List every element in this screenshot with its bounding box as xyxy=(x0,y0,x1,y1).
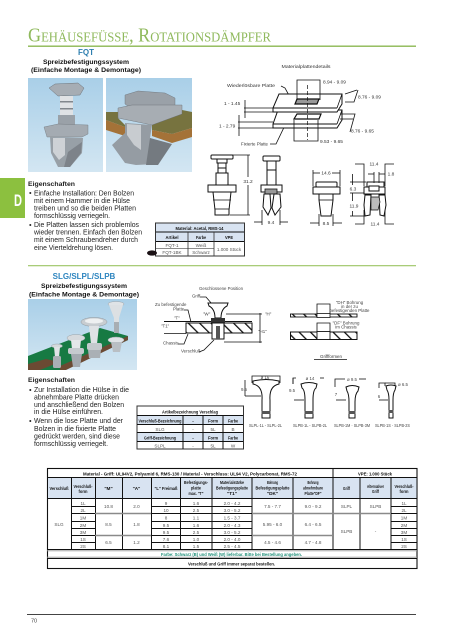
diagram: FQT bolt front view with 31.2 xyxy=(208,155,253,215)
text block: SLG properties: formschlüssig verriegelt. xyxy=(34,441,108,448)
table: main specifications: 3M xyxy=(401,530,407,535)
table: main specifications: Materialstärke xyxy=(220,480,244,485)
heading: FQT: FQT xyxy=(78,48,94,57)
table: main specifications: Befestigungsplatte xyxy=(216,486,248,490)
diagram: grip SLPB L: 9.5 xyxy=(289,388,296,393)
table: part number example: Form xyxy=(208,418,218,424)
table: main specifications: 9 xyxy=(165,501,168,506)
table: main specifications: "L" Freimaß xyxy=(154,486,178,491)
text block: SLG properties: Zur Installation die Hülse in die xyxy=(34,387,129,394)
table: main specifications: Alternativer xyxy=(367,484,384,489)
text block: FQT properties: Eigenschaften xyxy=(28,181,75,188)
divider: between product sections xyxy=(28,265,416,266)
table: part number example: Form xyxy=(208,436,218,440)
table: part number example: - xyxy=(192,436,194,440)
table: main specifications: 1.2 xyxy=(133,540,140,545)
heading: FQT: Spreizbefestigungssystem xyxy=(43,59,129,66)
table: main specifications: Bohrung xyxy=(267,480,278,485)
table: main specifications: 2M xyxy=(80,523,86,528)
table: main specifications: 5.95 - 6.0 xyxy=(263,522,283,527)
table: main specifications: SLPL xyxy=(341,504,353,509)
table: FQT material: VPE xyxy=(225,235,233,240)
diagram: hole sizes in plate and chassis xyxy=(290,300,370,340)
table: main specifications: form xyxy=(78,489,88,494)
table: part number example xyxy=(137,406,244,449)
table: main specifications xyxy=(47,468,417,568)
table: main specifications: "T1" xyxy=(227,491,237,496)
table: main specifications: Befestigungsplatte xyxy=(256,486,290,490)
diagram: material plate details xyxy=(219,64,381,148)
diagram: grip SLPB S xyxy=(375,382,410,428)
text block: FQT properties: mit einem Hammer in die Hülse xyxy=(34,198,130,205)
heading: SLG/SLPL/SLPB: (Einfache Montage & Demontage) xyxy=(29,292,139,298)
table: FQT material: 1.000 Stück xyxy=(217,247,242,252)
table: main specifications: form xyxy=(400,489,408,494)
table: FQT material: Weiß xyxy=(196,243,207,248)
table: main specifications: Verschluß und Griff immer separat bestellen. xyxy=(188,562,275,566)
text block: FQT properties xyxy=(28,181,142,252)
table: main specifications: Bohrung xyxy=(308,480,319,485)
photo: FQT mounted between plates xyxy=(106,78,192,172)
table: main specifications: Verschluß xyxy=(50,486,69,491)
table: main specifications: 2L xyxy=(401,508,407,513)
diagram: grip SLPB M: 7 xyxy=(335,392,338,397)
table: main specifications: 1L xyxy=(401,501,407,506)
table: main specifications: Griff xyxy=(343,486,350,491)
diagram: hole sizes in plate and chassis: "DH" Bohrung xyxy=(336,300,364,305)
diagram: FQT housing with 14.6 and 8.5: 14.6 xyxy=(321,170,331,176)
table: main specifications: Verschluß- xyxy=(74,484,93,489)
table: part number example: 5L xyxy=(210,427,216,432)
diagram: FQT housing with 14.6 and 8.5 xyxy=(310,170,342,227)
diagram: hole sizes in plate and chassis: "DF" Bohrung xyxy=(333,320,360,326)
diagram: closed position cross-section: Platte xyxy=(173,306,185,312)
table: FQT material: FQT-1BK xyxy=(162,250,183,255)
diagram: closed position cross-section xyxy=(155,286,272,354)
heading: FQT xyxy=(31,48,141,74)
table: main specifications: 10 xyxy=(163,508,169,513)
text block: SLG properties: und anschließend den Bolzen xyxy=(34,402,124,409)
diagram: grip SLPL: SLPL-1L - SLPL-2L xyxy=(249,423,282,428)
table: main specifications: Befestigungs- xyxy=(184,480,208,485)
diagram: FQT assembled section with 11.4, 1.8, 6.3, 11.9: 11.4 xyxy=(371,222,380,228)
table: FQT material: Farbe xyxy=(196,235,206,240)
table: main specifications: 1.5 - 3.7 xyxy=(224,516,241,520)
diagram: grip SLPB L: SLPB-1L - SLPB-2L xyxy=(293,423,327,428)
photo: SLG fasteners on green board xyxy=(28,299,137,370)
table: main specifications: Griff xyxy=(372,489,379,494)
table: main specifications: 2.0 xyxy=(133,504,140,509)
table: main specifications: 3.0 - 5.2 xyxy=(224,508,241,513)
table: part number example: - xyxy=(192,427,194,432)
table: part number example: - xyxy=(192,418,194,424)
diagram: grip SLPL: ø 16 xyxy=(261,375,270,380)
text block: SLG properties: gedrückt werden, sind diese xyxy=(34,434,120,440)
text block: SLG properties: in die Hülse einführen. xyxy=(34,409,103,416)
table: main specifications: VPE: 1.000 Stück xyxy=(358,472,392,476)
table: main specifications: "DK" xyxy=(267,491,278,496)
table: main specifications: SLPB xyxy=(341,529,352,534)
table: FQT material: FQT-1 xyxy=(165,243,179,248)
table: main specifications: 2L xyxy=(80,508,86,513)
heading: FQT: (Einfache Montage & Demontage) xyxy=(31,67,141,74)
diagram: grip SLPB S: 6 xyxy=(378,394,381,399)
table: main specifications: Material - Griff: UL94V2, Polyamid 6, RMS-130 / Material - Verschluss: UL94 V2, Polycarbonat, RMS-72 xyxy=(83,472,297,476)
table: main specifications: Farbe: Schwarz (B) und Weiß (W) lieferbar. Bitte bei Bestellung angeben. xyxy=(161,552,302,557)
diagram: FQT assembled section with 11.4, 1.8, 6.3, 11.9: 11.4 xyxy=(370,162,379,168)
diagram: material plate details: 9.53 - 9.65 xyxy=(320,139,343,145)
table: main specifications: 1M xyxy=(80,516,86,520)
table: main specifications: 6.5 xyxy=(105,540,112,545)
table: main specifications: 9.0 - 9.2 xyxy=(305,504,322,509)
table: main specifications: max. "T" xyxy=(188,491,204,496)
text block: SLG properties: Wenn die lose Platte und der xyxy=(34,418,124,425)
diagram: FQT assembled side view with 9.4: 9.4 xyxy=(268,220,275,226)
table: main specifications: 8.5 xyxy=(105,522,112,527)
diagram: FQT bolt front view with 31.2: 31.2 xyxy=(243,179,253,185)
text block: SLG properties: Bolzen in die fixierte Platte xyxy=(34,426,116,433)
diagram: grip SLPB M: SLPB-1M - SLPB-3M xyxy=(334,423,370,428)
table: main specifications: 3M xyxy=(80,530,86,535)
diagram: grip SLPB M: ø 9.5 xyxy=(347,377,358,382)
table: part number example: Farbe xyxy=(228,436,238,440)
table: part number example: W xyxy=(231,444,236,448)
diagram: closed position cross-section: "T1" xyxy=(161,324,170,328)
table: main specifications: Verschluß- xyxy=(394,484,414,489)
diagram: closed position cross-section: "T" xyxy=(174,316,180,320)
table: main specifications: 1S xyxy=(80,537,86,542)
table: main specifications: 2.0 - 4.0 xyxy=(224,537,241,542)
diagram: hole sizes in plate and chassis: in der zu xyxy=(341,304,358,309)
table: main specifications: 9.5 xyxy=(163,530,170,535)
table: part number example: - xyxy=(192,444,194,448)
photo: FQT fastener xyxy=(28,78,103,172)
table: part number example: Artikelbezeichnung Verschlag xyxy=(162,410,218,414)
table: main specifications: 3.0 - 5.2 xyxy=(224,530,241,535)
table: main specifications: 2.5 xyxy=(193,530,200,535)
text block: FQT properties: formschlüssig verriegeln. xyxy=(34,213,110,220)
tab: section D: D xyxy=(14,191,22,210)
table: main specifications: 10.8 xyxy=(104,504,113,509)
heading: SLG/SLPL/SLPB: SLG/SLPL/SLPB xyxy=(53,272,116,281)
heading: SLG/SLPL/SLPB xyxy=(29,272,139,298)
diagram: closed position cross-section: Chassis xyxy=(163,340,179,346)
table: main specifications: 1.6 xyxy=(193,523,200,528)
table: part number example: 5L xyxy=(210,444,216,448)
table: part number example: Farbe xyxy=(228,418,238,424)
table: main specifications: 6.4 - 6.5 xyxy=(305,522,322,527)
table: main specifications: 1.5 xyxy=(193,544,200,549)
diagram: grip SLPL xyxy=(241,375,282,428)
table: FQT material: Schwarz xyxy=(192,250,211,255)
table: part number example: Griff-Bezeichnung xyxy=(144,436,176,440)
text block: SLG properties: abnehmbare Platte drücken xyxy=(34,394,119,402)
label: Griffformen xyxy=(314,354,347,360)
diagram: grip SLPL: 9.5 xyxy=(241,387,248,392)
table: main specifications: 2.5 - 4.5 xyxy=(224,544,241,549)
heading: SLG/SLPL/SLPB: Spreizbefestigungssystem xyxy=(41,283,127,290)
table: FQT material: Material: Acetal, RMS-14 xyxy=(176,226,224,231)
text block: FQT properties: treiben und so die beiden Platten xyxy=(34,206,136,212)
footer: page number: 70 xyxy=(31,618,37,624)
text block: FQT properties: Einfache Installation: Den Bolzen xyxy=(34,190,134,198)
table: part number example: B xyxy=(231,427,235,432)
diagram: FQT assembled side view with 9.4 xyxy=(254,156,288,226)
diagram: closed position cross-section: "H" xyxy=(265,312,272,316)
table: main specifications: SLPB xyxy=(370,504,381,509)
table: main specifications: Platte"DF" xyxy=(304,491,322,496)
diagram: closed position cross-section: Zu befestigende xyxy=(155,302,187,307)
table: main specifications: 9.5 xyxy=(163,523,170,528)
table: part number example: Verschluß-Bezeichnung xyxy=(138,418,182,424)
table: main specifications: "A" xyxy=(133,486,140,491)
table: main specifications: 2S xyxy=(80,544,86,549)
table: main specifications: 2M xyxy=(401,523,407,528)
tab: section D xyxy=(0,178,25,218)
table: part number example: SLG xyxy=(155,427,165,432)
table: main specifications: abnehmbare xyxy=(303,486,323,490)
diagram: material plate details: Fixierte Platte xyxy=(241,142,268,148)
diagram: grip SLPB L xyxy=(289,376,327,428)
table: main specifications: 7.6 xyxy=(163,537,170,542)
table: main specifications: 7.5 - 7.7 xyxy=(264,504,281,509)
diagram: FQT assembled section with 11.4, 1.8, 6.3, 11.9: 6.3 xyxy=(350,186,357,192)
table: main specifications: 4.5 - 4.6 xyxy=(264,540,281,545)
table: part number example: SLPL xyxy=(154,444,166,448)
table: main specifications: 8.1 xyxy=(163,544,170,549)
diagram: closed position cross-section: Geschlossene Position xyxy=(199,286,244,291)
text block: FQT properties: Die Platten lassen sich problemlos xyxy=(34,222,140,229)
table: main specifications: 2S xyxy=(401,544,407,549)
table: main specifications: 8 xyxy=(165,516,168,520)
label: Griffformen: Griffformen xyxy=(320,354,342,360)
text block: FQT properties: wieder trennen. Einfach den Bolzen xyxy=(33,230,142,236)
text block: SLG properties xyxy=(28,377,129,448)
diagram: hole sizes in plate and chassis: befestigenden Platte xyxy=(329,308,370,313)
diagram: closed position cross-section: "H1" xyxy=(258,329,267,334)
diagram: closed position cross-section: Verschluß xyxy=(181,348,201,354)
diagram: material plate details: 1 - 2.79 xyxy=(219,124,236,130)
diagram: closed position cross-section: "W" xyxy=(203,312,211,316)
diagram: grip SLPB S: ø 6.5 xyxy=(398,382,409,387)
diagram: material plate details: Materialplattendetails xyxy=(282,64,331,70)
diagram: material plate details: 1 - 1.45 xyxy=(224,101,241,107)
table: main specifications: 2.5 xyxy=(193,508,200,513)
diagram: material plate details: 8.76 - 9.09 xyxy=(358,94,381,100)
table: main specifications: - xyxy=(375,529,377,534)
table: main specifications: platte xyxy=(191,486,201,490)
table: FQT material: Artikel xyxy=(166,235,178,240)
table: main specifications: 2.0 - 4.2 xyxy=(224,501,241,506)
diagram: FQT housing with 14.6 and 8.5: 8.5 xyxy=(323,221,330,227)
diagram: FQT assembled section with 11.4, 1.8, 6.3, 11.9 xyxy=(350,162,395,228)
diagram: material plate details: Wiederlösbare Platte xyxy=(227,83,275,89)
text block: SLG properties: Eigenschaften xyxy=(28,377,75,384)
diagram: FQT assembled section with 11.4, 1.8, 6.3, 11.9: 11.9 xyxy=(350,204,359,210)
table: main specifications: 1M xyxy=(401,516,407,520)
diagram: grip SLPB S: SLPB-1S - SLPB-2S xyxy=(375,423,410,428)
table: main specifications: 4.7 - 4.8 xyxy=(305,540,322,545)
table: main specifications: 1.0 xyxy=(193,537,200,542)
text block: FQT properties: eine Vierteldrehung lösen. xyxy=(34,245,113,252)
table: main specifications: 1S xyxy=(401,537,407,542)
diagram: hole sizes in plate and chassis: im Chassis xyxy=(335,324,358,330)
diagram: closed position cross-section: Griff xyxy=(192,294,201,298)
text block: FQT properties: mit einem Schraubendreher durch xyxy=(34,237,138,244)
table: main specifications: 1.6 xyxy=(193,501,200,506)
table: main specifications: SLG xyxy=(54,522,64,527)
table: main specifications: 1.8 xyxy=(133,522,140,527)
diagram: material plate details: 8.94 - 9.09 xyxy=(323,80,346,86)
diagram: FQT assembled section with 11.4, 1.8, 6.3, 11.9: 1.8 xyxy=(388,172,395,178)
diagram: material plate details: 8.76 - 9.65 xyxy=(351,128,374,134)
diagram: grip SLPB M xyxy=(334,377,370,428)
title: Gehäusefüsse, Rotationsdämpfer xyxy=(28,24,272,46)
diagram: grip SLPB L: ø 14 xyxy=(306,376,315,381)
table: main specifications: 2.0 - 4.3 xyxy=(224,523,241,528)
table: FQT material xyxy=(156,223,244,256)
marker: black blob beside FQT-1BK xyxy=(147,250,157,256)
table: main specifications: 1L xyxy=(80,501,86,506)
table: main specifications: "M" xyxy=(104,486,113,491)
table: main specifications: 1.1 xyxy=(193,516,200,520)
